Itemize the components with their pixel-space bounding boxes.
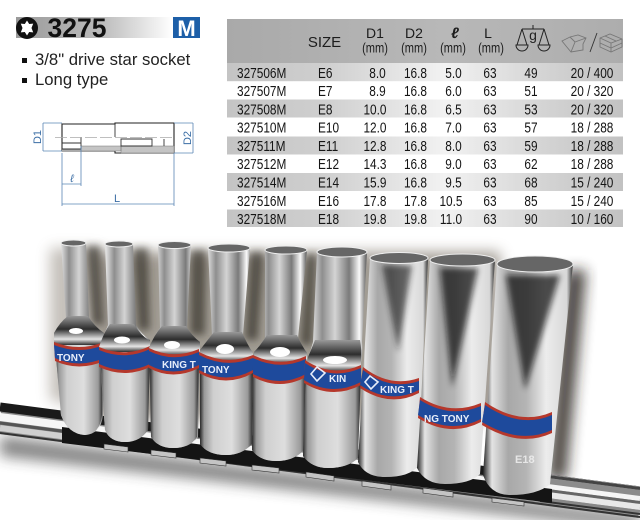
title band (16, 13, 200, 43)
socket E8 (149, 242, 200, 448)
socket dimension diagram: ℓ (69, 173, 74, 185)
row 327507M: 327507M (237, 83, 286, 99)
row 327512M: 62 (524, 156, 538, 172)
socket dimension diagram: L (114, 193, 120, 205)
row 327511M: 12.8 (363, 138, 387, 154)
socket E8: KING T (162, 360, 196, 371)
row 327512M: 9.0 (445, 156, 462, 172)
row 327510M: 7.0 (445, 119, 462, 136)
rail clips (104, 444, 524, 506)
row 327514M: 63 (483, 174, 497, 191)
row 327518M: 327518M (237, 211, 286, 227)
row 327510M: 18 / 288 (571, 119, 613, 136)
row 327511M: E11 (318, 138, 338, 154)
row 327518M: 11.0 (440, 211, 462, 227)
specification table (227, 19, 623, 227)
socket E16 (417, 254, 495, 484)
row 327511M: 8.0 (445, 138, 462, 154)
row 327507M: 6.0 (445, 83, 462, 99)
table header (227, 19, 623, 63)
metric badge (173, 16, 200, 41)
row 327516M: 63 (483, 193, 497, 209)
row 327508M: 16.8 (404, 101, 427, 118)
row 327518M: E18 (318, 211, 339, 227)
table header: L (484, 25, 492, 41)
icon: weight scale (516, 25, 550, 51)
socket E14 (358, 252, 428, 477)
row 327508M (237, 101, 613, 118)
row 327512M: 14.3 (363, 156, 387, 172)
row 327510M (237, 119, 613, 136)
row 327506M: 327506M (237, 65, 286, 81)
row 327516M: 17.8 (363, 193, 387, 209)
socket E16: NG TONY (424, 414, 470, 425)
table header: D1 (366, 25, 384, 41)
feature bullets (22, 50, 191, 89)
table header: (mm) (362, 40, 388, 56)
row 327518M: 63 (483, 211, 497, 227)
row 327510M: E10 (318, 119, 339, 136)
table header: (mm) (401, 40, 427, 56)
row 327506M (237, 65, 613, 81)
socket E11 (252, 246, 307, 461)
row 327512M (237, 156, 613, 172)
row 327507M: 8.9 (369, 83, 386, 99)
socket E7 (99, 241, 150, 442)
row 327516M: E16 (318, 193, 339, 209)
socket dimension diagram: D1 (32, 130, 44, 144)
row 327512M: 63 (483, 156, 497, 172)
rail shadow under sockets (62, 427, 552, 503)
row 327507M: 51 (524, 83, 538, 99)
row 327506M: 49 (524, 65, 538, 81)
row 327508M: 63 (483, 101, 497, 118)
socket E18: E18 (515, 454, 535, 466)
photo: socket set on rail (0, 240, 640, 520)
table row stripes (227, 63, 623, 227)
row 327514M (237, 174, 613, 191)
row 327514M: 327514M (237, 174, 286, 191)
row 327507M (237, 83, 613, 99)
row 327511M: 327511M (237, 138, 285, 154)
socket E12 (303, 247, 367, 468)
row 327512M: E12 (318, 156, 339, 172)
row 327514M: E14 (318, 174, 339, 191)
row 327508M: 10.0 (363, 101, 387, 118)
rail and socket shadows (0, 246, 640, 520)
socket dimension diagram: D2 (182, 131, 194, 145)
row 327508M: 6.5 (445, 101, 462, 118)
row 327507M: E7 (318, 83, 332, 99)
table header: (mm) (478, 40, 504, 56)
feature bullets: Long type (35, 70, 108, 89)
row 327508M: E8 (318, 101, 332, 118)
socket E6 (54, 240, 104, 435)
row 327516M: 10.5 (439, 193, 463, 209)
table header: SIZE (308, 34, 341, 51)
row 327511M: 16.8 (404, 138, 427, 154)
socket E10 (199, 244, 253, 455)
row 327518M: 10 / 160 (571, 211, 613, 227)
row 327510M: 12.0 (363, 119, 387, 136)
row 327516M: 327516M (237, 193, 286, 209)
row 327506M: 5.0 (445, 65, 462, 81)
row 327518M: 90 (524, 211, 538, 227)
metric badge: M (177, 16, 196, 41)
row 327512M: 16.8 (404, 156, 427, 172)
row 327507M: 16.8 (404, 83, 427, 99)
row 327510M: 327510M (237, 119, 286, 136)
table header: ℓ (451, 25, 459, 42)
socket E10: TONY (202, 365, 230, 376)
row 327511M: 18 / 288 (571, 138, 613, 154)
row 327514M: 9.5 (445, 174, 462, 191)
icon: star circle (16, 17, 38, 39)
row 327506M: E6 (318, 65, 332, 81)
row 327506M: 16.8 (404, 65, 427, 81)
socket E6: TONY (57, 353, 85, 364)
row 327516M: 85 (524, 193, 538, 209)
row 327506M: 63 (483, 65, 497, 81)
row 327518M (237, 211, 613, 227)
socket E14: KING T (380, 385, 414, 396)
row 327514M: 15 / 240 (571, 174, 613, 191)
row 327514M: 68 (524, 174, 538, 191)
table header: (mm) (440, 40, 466, 56)
row 327506M: 8.0 (369, 65, 386, 81)
row 327507M: 63 (483, 83, 497, 99)
row 327506M: 20 / 400 (571, 65, 613, 81)
rail right end (540, 476, 640, 514)
rail (0, 407, 640, 517)
feature bullets: 3/8" drive star socket (35, 50, 191, 69)
row 327508M: 20 / 320 (571, 101, 613, 118)
table header: D2 (405, 25, 423, 41)
icon: brand mark (311, 367, 325, 381)
row 327514M: 16.8 (404, 174, 427, 191)
socket dimension diagram (32, 123, 194, 206)
row 327512M: 327512M (237, 156, 286, 172)
product number: 3275 (48, 13, 106, 43)
row 327518M: 19.8 (363, 211, 387, 227)
row 327510M: 57 (524, 119, 538, 136)
row 327512M: 18 / 288 (571, 156, 613, 172)
row 327518M: 19.8 (404, 211, 427, 227)
row 327510M: 16.8 (404, 119, 427, 136)
row 327516M: 15 / 240 (571, 193, 613, 209)
icon: weight scale: g (529, 27, 537, 43)
row 327516M: 17.8 (404, 193, 427, 209)
row 327511M: 63 (483, 138, 497, 154)
row 327516M (237, 193, 613, 209)
row 327511M: 59 (524, 138, 538, 154)
row 327511M (237, 138, 613, 154)
row 327507M: 20 / 320 (571, 83, 613, 99)
icon: carton boxes (562, 33, 622, 52)
row 327514M: 15.9 (363, 174, 387, 191)
socket E12: KIN (329, 374, 346, 385)
row 327508M: 327508M (237, 101, 286, 118)
row 327510M: 63 (483, 119, 497, 136)
socket E18 (482, 256, 573, 495)
row 327508M: 53 (524, 101, 538, 118)
